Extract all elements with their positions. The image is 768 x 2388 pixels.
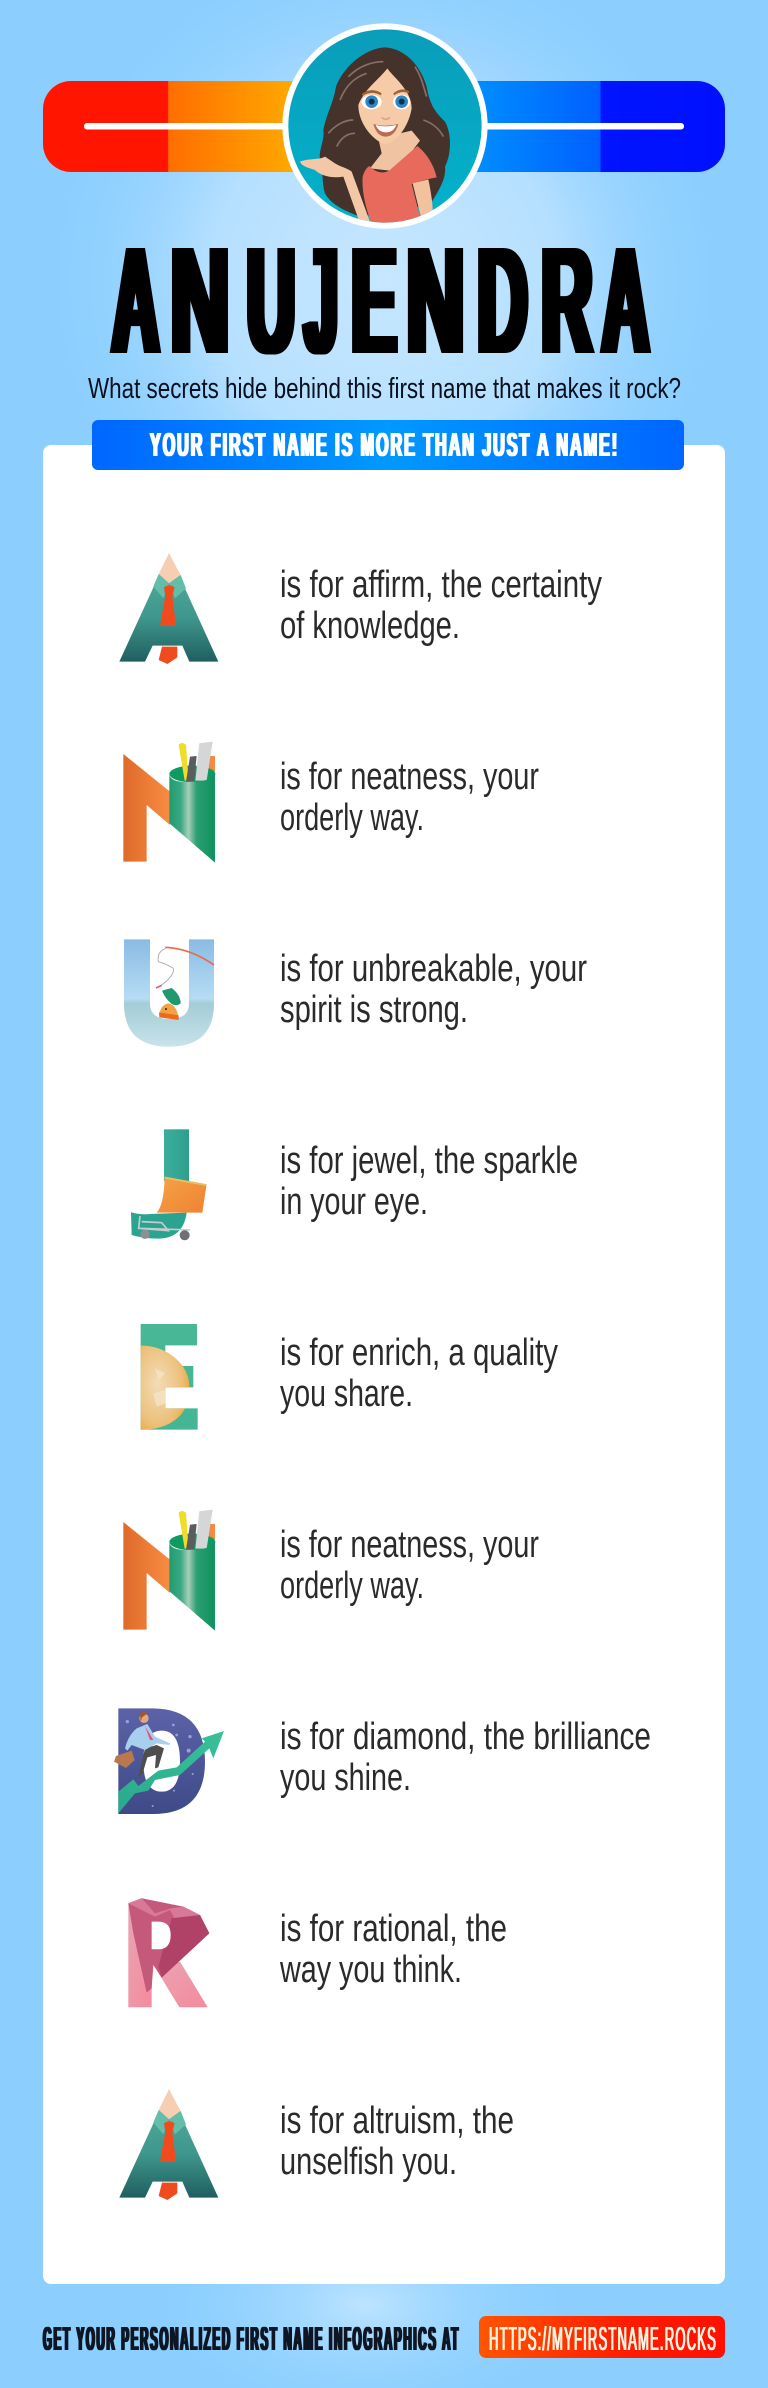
text: A (280, 564, 602, 647)
icon: letter U with fishing scene (124, 939, 214, 1047)
row 9: letter A (119, 2089, 514, 2200)
row 2: letter N (123, 742, 539, 863)
text: U (280, 948, 587, 1031)
title: N (406, 216, 464, 386)
text: A: is for affirm, the certainty (280, 564, 602, 606)
text: N (280, 756, 539, 839)
text: D (280, 1716, 651, 1799)
icon: letter N with pencil cup (123, 742, 215, 863)
text: A (602, 216, 649, 386)
title: U (247, 216, 295, 386)
text: N: orderly way. (280, 797, 424, 839)
text: J: is for jewel, the sparkle (280, 1140, 578, 1182)
title (112, 216, 649, 386)
icon: letter J with shopping cart (131, 1129, 207, 1240)
text: N: is for neatness, your (280, 756, 539, 798)
text: E: you share. (280, 1373, 413, 1415)
text: R: way you think. (279, 1949, 462, 1991)
text: R (279, 1908, 507, 1991)
row 3: letter U (124, 939, 587, 1047)
text: A (280, 2100, 514, 2183)
text: D: you shine. (280, 1757, 411, 1799)
icon: letter E with moon (141, 1324, 198, 1430)
icon: letter D with businessman and arrow (114, 1708, 224, 1814)
row 5: letter E (141, 1324, 558, 1430)
text: A: is for altruism, the (280, 2100, 514, 2142)
text: N (280, 1524, 539, 1607)
white content panel (43, 445, 725, 2284)
title: E (352, 216, 397, 386)
text: A: unselfish you. (280, 2141, 457, 2183)
banner (92, 420, 684, 470)
text: U: spirit is strong. (280, 989, 468, 1031)
row 4: letter J (131, 1129, 578, 1240)
title: J (305, 216, 338, 386)
avatar portrait (282, 23, 488, 229)
icon: letter A with suit and tie (119, 553, 218, 664)
row 1: letter A (119, 553, 602, 664)
text: U: is for unbreakable, your (280, 948, 587, 990)
icon: letter N with pencil cup (123, 1510, 215, 1631)
icon: letter R with ruby gem (128, 1898, 209, 2007)
text: E (280, 1332, 558, 1415)
header bar (43, 81, 725, 172)
icon: letter A with suit and tie (119, 2089, 218, 2200)
title: D (478, 216, 528, 386)
text: N: is for neatness, your (280, 1524, 539, 1566)
text: E: is for enrich, a quality (280, 1332, 558, 1374)
row 6: letter N (123, 1510, 539, 1631)
title: A (112, 216, 159, 386)
row 7: letter D (114, 1708, 651, 1814)
text: D: is for diamond, the brilliance (280, 1716, 651, 1758)
text: J (280, 1140, 578, 1223)
text: N: orderly way. (280, 1565, 424, 1607)
text: R: is for rational, the (280, 1908, 507, 1950)
row 8: letter R (128, 1898, 507, 2007)
title: R (541, 216, 592, 386)
title: N (170, 216, 230, 386)
text: J: in your eye. (280, 1181, 428, 1223)
text: A: of knowledge. (280, 605, 460, 647)
